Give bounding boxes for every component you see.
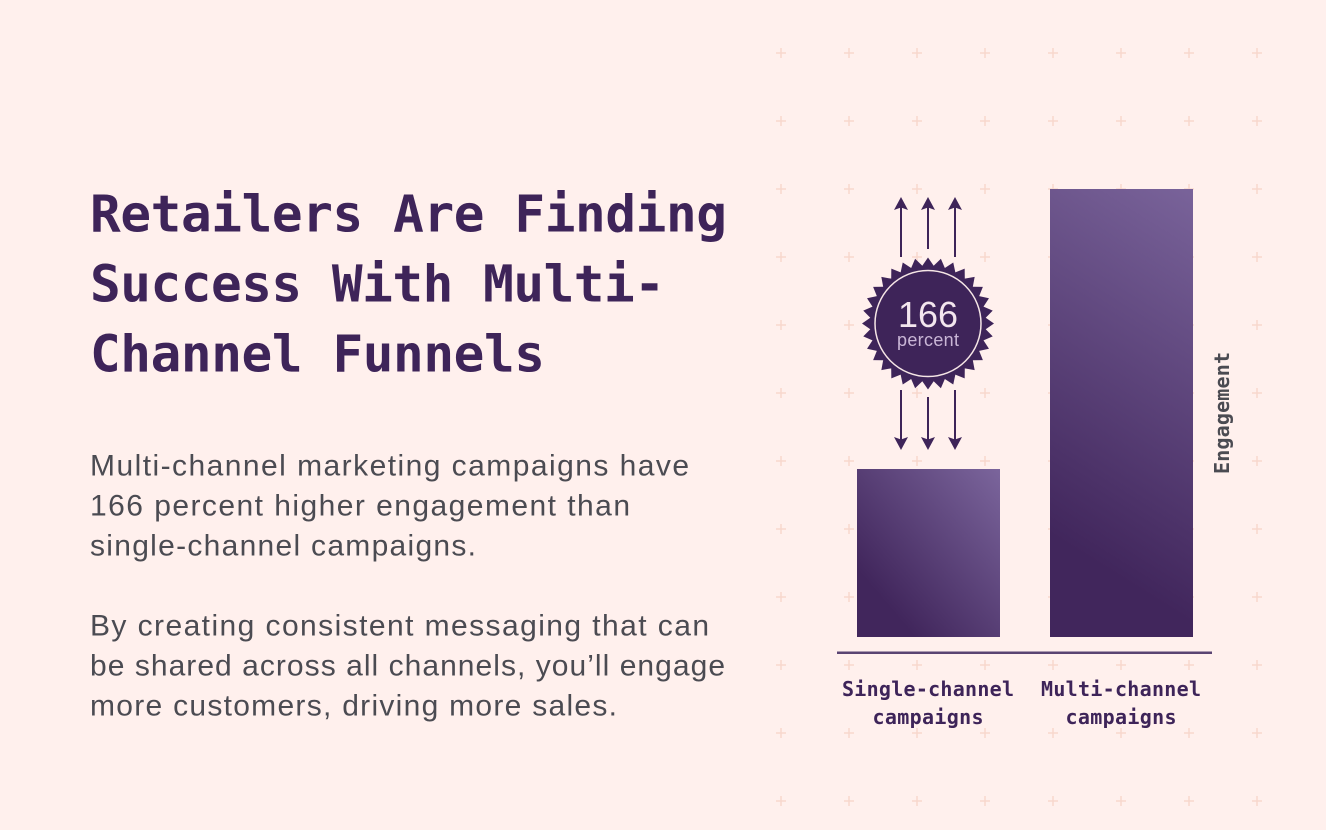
title: Retailers Are Finding <box>90 186 727 244</box>
arrows: up <box>894 197 962 257</box>
label: multi-channel campaigns: Multi-channel <box>1041 677 1201 701</box>
text block: consistent messaging <box>90 610 725 722</box>
arrows: down <box>894 390 962 450</box>
axis label: engagement: Engagement <box>1210 352 1234 474</box>
title: Channel Funnels <box>90 326 545 384</box>
label: multi-channel campaigns: campaigns <box>1066 705 1176 729</box>
text block: engagement statistic: Multi-channel marketing campaigns have <box>90 450 689 482</box>
title: Success With Multi- <box>90 256 665 314</box>
bar: multi-channel campaigns <box>1050 189 1193 637</box>
text block: consistent messaging: By creating consistent messaging that can <box>90 610 709 642</box>
badge: 166 percent: percent <box>897 330 959 350</box>
text block: consistent messaging: be shared across all channels, you’ll engage <box>90 650 725 682</box>
badge: 166 percent <box>862 258 994 390</box>
label: multi-channel campaigns <box>1041 677 1201 729</box>
text block: engagement statistic: single-channel campaigns. <box>90 530 476 562</box>
chart baseline <box>837 652 1212 654</box>
text block: engagement statistic: 166 percent higher engagement than <box>90 490 630 522</box>
text block: consistent messaging: more customers, driving more sales. <box>90 690 617 722</box>
label: single-channel campaigns: Single-channel <box>842 677 1014 701</box>
text block: engagement statistic <box>90 450 689 562</box>
label: single-channel campaigns <box>842 677 1014 729</box>
badge: 166 percent: 166 <box>898 294 958 335</box>
title <box>90 186 727 384</box>
bar: single-channel campaigns <box>857 469 1000 637</box>
label: single-channel campaigns: campaigns <box>872 705 984 729</box>
